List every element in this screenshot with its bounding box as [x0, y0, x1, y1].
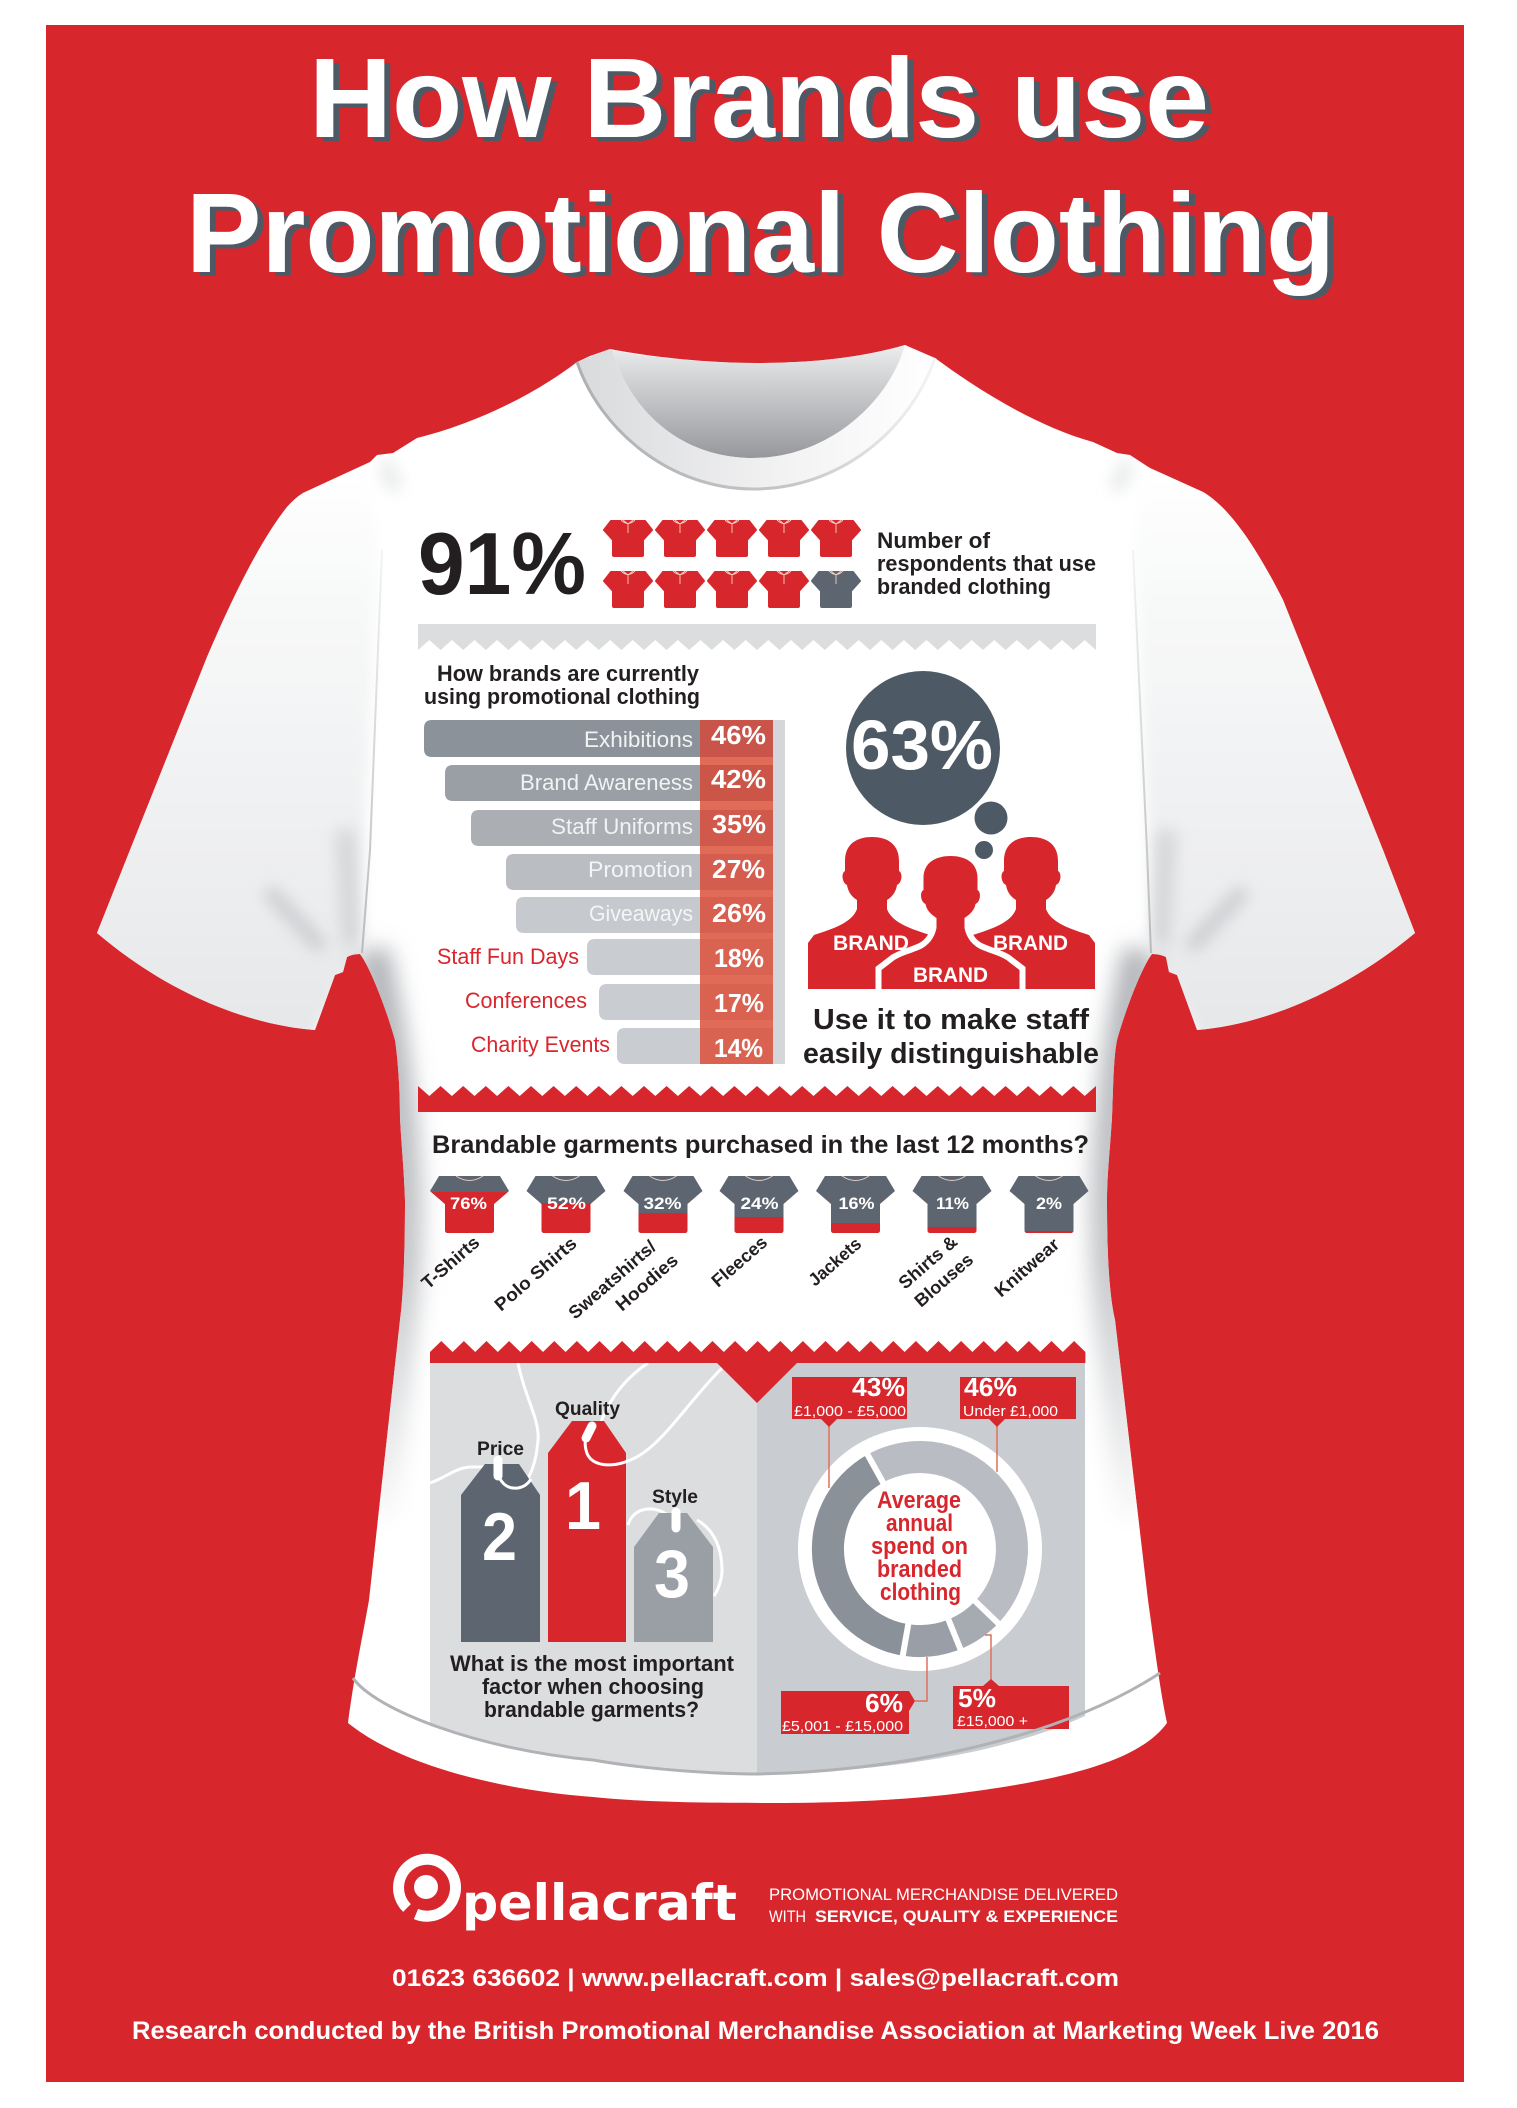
- callout: 46%: Under £1,000: [963, 1403, 1058, 1420]
- garment labels: [418, 1231, 1063, 1323]
- heading: how brands are currently using: using promotional clothing: [424, 684, 700, 709]
- thought bubble: 63%: [846, 671, 1008, 859]
- text: number of respondents: Number of: [877, 528, 991, 553]
- logo: pellacraft: pellacraft: [462, 1874, 737, 1932]
- donut centre text: clothing: [880, 1579, 961, 1606]
- logo mark: [399, 1859, 456, 1916]
- bar: Conferences 17%: [465, 984, 773, 1020]
- shirt: Sweatshirts 32%: [624, 1176, 702, 1233]
- bar: Charity Events 14%: 14%: [714, 1033, 763, 1063]
- tag labels: Style: [652, 1487, 698, 1508]
- garment labels: T-Shirts: [418, 1232, 483, 1293]
- garment labels: Polo Shirts: [491, 1233, 581, 1315]
- text: use it to make staff easily distinguishable: easily distinguishable: [803, 1038, 1099, 1070]
- donut centre text: branded: [877, 1556, 962, 1583]
- price tag 3: 3: [654, 1536, 690, 1612]
- question text: brandable garments?: [484, 1697, 699, 1722]
- bar: Brand Awareness 42%: Brand Awareness: [520, 770, 693, 795]
- panel: average annual spend: [757, 1363, 1085, 1774]
- string: tag 1 lower: [585, 1368, 722, 1465]
- text: use it to make staff easily distinguishable: Use it to make staff: [813, 1004, 1089, 1036]
- heading: how brands are currently using: [424, 661, 700, 709]
- garment labels: Fleeces: [708, 1232, 771, 1291]
- research source: Research conducted by the British Promotional Merchandise Association at Marketing Week Live 2016: [132, 2017, 1379, 2045]
- logo: pellacraft: [399, 1859, 737, 1932]
- callout: 5%: £15,000 +: [957, 1713, 1028, 1730]
- callout: 43%: £1,000 - £5,000: [794, 1403, 906, 1420]
- callout: 5%: 5%: [958, 1683, 996, 1713]
- bar: Staff Uniforms 35%: Staff Uniforms: [551, 814, 693, 839]
- icon row: ten shirts, nine red: [604, 520, 860, 607]
- shirt: Fleeces 24%: [720, 1176, 798, 1233]
- title: Promotional Clothing: [186, 170, 1335, 296]
- tagline: WITH: [769, 1907, 806, 1926]
- tagline: PROMOTIONAL MERCHANDISE DELIVERED: [769, 1885, 1118, 1904]
- title: [186, 35, 1335, 296]
- callout: 6%: 6%: [865, 1688, 903, 1718]
- title: How Brands use: [309, 35, 1209, 161]
- bar: Charity Events 14%: Charity Events: [471, 1032, 610, 1057]
- question text: factor when choosing: [482, 1674, 704, 1699]
- price tag 1: 1: [565, 1468, 601, 1544]
- shirt: Polo Shirts 52%: [526, 1176, 606, 1233]
- tag labels: Price: [477, 1439, 524, 1460]
- bar: Promotion 27%: Promotion: [588, 857, 693, 882]
- price tag 1: [548, 1421, 626, 1642]
- price tag 2: [461, 1460, 540, 1642]
- shirt: T-Shirts 76%: 76%: [450, 1194, 487, 1213]
- donut centre text: annual: [886, 1510, 953, 1537]
- heading: how brands are currently using: How brands are currently: [437, 661, 700, 686]
- garment labels: Shirts &: [895, 1231, 961, 1293]
- callout: 6%: [781, 1657, 927, 1735]
- bar: Giveaways 26%: Giveaways: [589, 901, 693, 926]
- string: tag 3: [628, 1509, 722, 1596]
- donut centre text: Average: [877, 1487, 961, 1514]
- donut centre text: [871, 1487, 968, 1606]
- shirt: Jackets 16%: 16%: [838, 1194, 874, 1213]
- tag labels: [477, 1399, 698, 1508]
- text: use it to make staff easily distinguishable: [803, 1004, 1099, 1070]
- callout: 5%: [953, 1635, 1069, 1730]
- price tag 2: 2: [482, 1499, 517, 1575]
- bar: Promotion 27%: [506, 854, 773, 890]
- bar: Exhibitions 46%: [424, 720, 773, 757]
- icon: three branded staff: [808, 837, 1095, 989]
- bar: Conferences 17%: 17%: [714, 988, 764, 1018]
- t-shirt illustration: [60, 345, 1452, 1803]
- contact details: 01623 636602 | www.pellacraft.com | sales@pellacraft.com: [392, 1965, 1119, 1992]
- string: tag 1 upper: [600, 1363, 648, 1425]
- shirt: Knitwear 2%: 2%: [1036, 1194, 1062, 1213]
- shirt: T-Shirts 76%: [430, 1176, 509, 1233]
- shirt: Fleeces 24%: 24%: [740, 1194, 778, 1213]
- bar: Exhibitions 46%: 46%: [711, 720, 766, 750]
- bar: Staff Fun Days 18%: 18%: [714, 943, 764, 973]
- text: number of respondents: [877, 528, 1096, 599]
- icon: three branded staff: BRAND: [833, 932, 909, 955]
- person left: [808, 837, 936, 989]
- neck opening: [612, 345, 905, 458]
- shirt: Polo Shirts 52%: 52%: [547, 1194, 586, 1213]
- bar: Promotion 27%: 27%: [712, 854, 765, 884]
- callout: 43%: [792, 1372, 907, 1488]
- garment labels: Knitwear: [991, 1234, 1063, 1301]
- shirt: Sweatshirts 32%: 32%: [644, 1194, 682, 1213]
- garment labels: Hoodies: [612, 1250, 682, 1315]
- bar: Exhibitions 46%: Exhibitions: [584, 727, 693, 752]
- question text: What is the most important: [450, 1651, 735, 1676]
- garment labels: Blouses: [911, 1249, 977, 1311]
- shirt: Jackets 16%: [816, 1176, 895, 1233]
- bar: Conferences 17%: Conferences: [465, 988, 587, 1013]
- donut centre text: spend on: [871, 1533, 968, 1560]
- callout: 43%: 43%: [852, 1372, 905, 1402]
- callout: 6%: £5,001 - £15,000: [782, 1718, 903, 1735]
- tagline: [769, 1885, 1118, 1926]
- bar: Giveaways 26%: [516, 897, 773, 933]
- chart: garment shirts filled by percent: [430, 1176, 1088, 1233]
- bar: Brand Awareness 42%: 42%: [711, 764, 766, 794]
- question text: [450, 1651, 735, 1722]
- thought bubble: 63%: 63%: [851, 706, 993, 784]
- person centre: [882, 856, 1020, 989]
- shirt: Knitwear 2%: [1010, 1176, 1088, 1233]
- person right: [967, 837, 1095, 989]
- price tag 3: [634, 1512, 713, 1642]
- bar: Staff Uniforms 35%: [471, 809, 773, 846]
- icon: three branded staff: BRAND: [993, 932, 1068, 955]
- bar: Staff Fun Days 18%: [437, 939, 773, 975]
- bar: Giveaways 26%: 26%: [712, 898, 766, 928]
- collar: [577, 345, 935, 489]
- bar: Staff Uniforms 35%: 35%: [712, 809, 766, 839]
- bar: Staff Fun Days 18%: Staff Fun Days: [437, 944, 579, 969]
- tagline: SERVICE, QUALITY & EXPERIENCE: [815, 1907, 1118, 1926]
- donut chart: [798, 1427, 1042, 1671]
- bar chart: current uses: [424, 720, 785, 1064]
- callout: 46%: 46%: [964, 1372, 1017, 1402]
- collar band: [577, 345, 935, 489]
- heading: brandable garments: Brandable garments purchased in the last 12 months?: [432, 1131, 1089, 1159]
- shirt: Shirts and Blouses 11%: 11%: [936, 1194, 969, 1213]
- callout: 46%: [960, 1372, 1076, 1472]
- text: number of respondents: respondents that use: [877, 551, 1096, 576]
- icon: three branded staff: BRAND: [913, 964, 988, 987]
- garment labels: Sweatshirts/: [565, 1236, 660, 1323]
- tag labels: Quality: [555, 1399, 620, 1420]
- panel: most important factor: [430, 1363, 757, 1774]
- shirt: Shirts and Blouses 11%: [912, 1176, 992, 1233]
- garment labels: Jackets: [805, 1234, 865, 1290]
- text: number of respondents: branded clothing: [877, 574, 1051, 599]
- bar: Charity Events 14%: [471, 1028, 773, 1064]
- string: tag 2: [430, 1363, 538, 1488]
- bar: Brand Awareness 42%: [445, 764, 773, 801]
- stat: 91%: 91%: [418, 514, 586, 613]
